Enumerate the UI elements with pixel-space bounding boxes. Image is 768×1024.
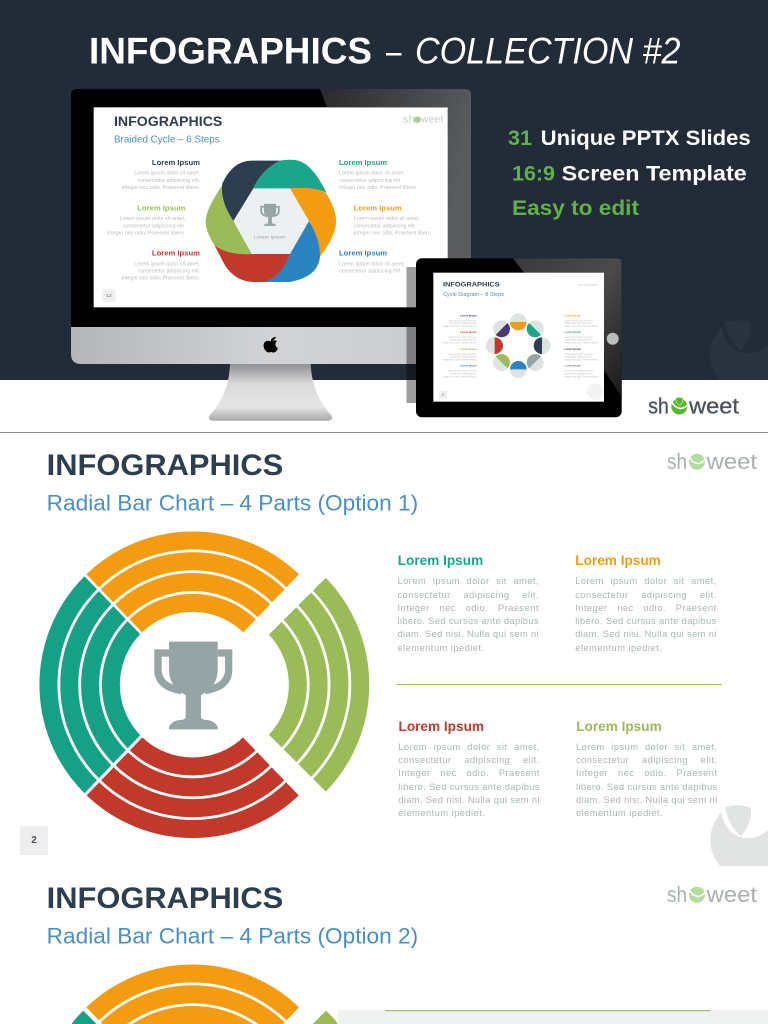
tablet screen slide: consectetur adipiscing elit. (449, 372, 477, 375)
monitor screen slide: consectetur adipiscing elit. (123, 223, 185, 229)
divider between header and slide (0, 432, 768, 433)
tablet home button (607, 333, 619, 345)
slide 1 heading (47, 449, 418, 516)
monitor screen slide: Lorem Ipsum (152, 158, 200, 167)
tablet screen slide: Integer nec odio. Praesent libero. (442, 325, 477, 328)
tablet screen slide: Lorem ipsum dolor sit amet, (448, 319, 477, 322)
text block: orange: Integer nec odio. Praesent (575, 603, 717, 613)
text block: green: libero. Sed cursus ante dapibus (576, 782, 718, 792)
monitor screen slide: Lorem Ipsum (152, 248, 200, 257)
feature list: Unique PPTX Slides (541, 127, 751, 150)
text block: teal: elementum ipediet. (398, 643, 485, 653)
red rings (86, 737, 299, 838)
text column divider (397, 684, 722, 685)
tablet screen slide: Integer nec odio. Praesent libero. (564, 375, 599, 378)
icon: small trophy (261, 204, 279, 226)
tablet screen slide: Lorem ipsum dolor sit amet, (564, 353, 593, 356)
tablet screen slide: Integer nec odio. Praesent libero. (564, 325, 599, 328)
icon: apple logo (264, 337, 278, 352)
monitor screen slide (94, 107, 448, 307)
tablet screen slide: Integer nec odio. Praesent libero. (564, 342, 599, 345)
monitor screen slide: consectetur adipiscing elit. (354, 223, 416, 229)
page number: 2 (31, 835, 37, 846)
header logo (648, 394, 739, 418)
text block: orange: elementum ipediet. (575, 643, 662, 653)
title (89, 30, 681, 72)
column headings: Lorem Ipsum (398, 552, 483, 568)
text block: orange: consectetur adipiscing elit. (575, 590, 717, 600)
monitor bezel (71, 89, 471, 327)
monitor screen slide: INFOGRAPHICS (114, 113, 222, 129)
slide 2 heading: INFOGRAPHICS (47, 882, 283, 915)
tablet screen slide: Lorem Ipsum (460, 330, 477, 334)
slide 2 gray panel (338, 1010, 768, 1024)
tablet screen slide: consectetur adipiscing elit. (449, 322, 477, 325)
icon: trophy (158, 642, 229, 729)
watermark logo (710, 805, 768, 866)
tablet screen slide: consectetur adipiscing elit. (449, 339, 477, 342)
monitor screen slide: Lorem ipsum dolor sit amet, (134, 261, 200, 267)
teal rings (39, 576, 140, 794)
slide 2 logo: sh (667, 882, 687, 907)
monitor screen slide: Lorem Ipsum (339, 248, 387, 257)
tablet screen slide: Integer nec odio. Praesent libero. (564, 359, 599, 362)
text block: teal: Lorem ipsum dolor sit amet, (398, 576, 539, 586)
orange rings (86, 532, 299, 632)
text block: red: consectetur adipiscing elit. (398, 755, 540, 765)
braided hexagon (206, 160, 336, 282)
column headings (398, 552, 662, 734)
monitor screen slide: Lorem Ipsum (354, 203, 402, 212)
text block: red: Lorem ipsum dolor sit amet, (398, 742, 540, 752)
tablet screen slide: 8 (442, 393, 444, 397)
monitor screen slide: Integer nec odio. Praesent libero. (121, 185, 200, 191)
orange bands (86, 964, 299, 1024)
text block: green: Integer nec odio. Praesent (576, 768, 718, 778)
text block: orange (575, 576, 717, 653)
slide 2 panel rule (385, 1010, 710, 1011)
tablet screen slide: Lorem ipsum dolor sit amet, (448, 353, 477, 356)
monitor screen slide: Lorem Ipsum (137, 203, 186, 212)
monitor screen slide: sh (402, 115, 415, 126)
monitor screen slide: Integer nec odio. Praesent libero. (354, 230, 432, 236)
monitor screen slide: Lorem ipsum dolor sit amet, (134, 171, 200, 177)
header logo: sh (648, 394, 669, 418)
monitor screen slide: Lorem Ipsum (339, 158, 387, 167)
slide 1 logo: weet (706, 449, 757, 474)
slide 2 heading: Radial Bar Chart – 4 Parts (Option 2) (47, 924, 418, 949)
slide 1 logo: sh (667, 449, 687, 474)
title: INFOGRAPHICS (89, 30, 372, 72)
header logo: weet (688, 394, 739, 418)
feature list: Easy to edit (512, 197, 639, 220)
tablet screen slide: Integer nec odio. Praesent libero. (442, 359, 477, 362)
tablet screen slide: Lorem ipsum dolor sit amet, (448, 370, 477, 373)
monitor screen slide: Integer nec odio. Praesent libero. (121, 276, 200, 282)
monitor chin (71, 327, 471, 364)
monitor (71, 89, 471, 421)
radial bar chart 2 (72, 964, 338, 1024)
text block: red: diam. Sed nisi. Nulla qui sem ni (398, 795, 540, 805)
tablet screen slide: consectetur adipiscing elit. (449, 356, 477, 359)
teal band tip (72, 1011, 96, 1024)
slide 2 logo: weet (706, 882, 757, 907)
slide 1 heading: INFOGRAPHICS (47, 449, 283, 482)
tablet screen slide: Lorem Ipsum (564, 347, 582, 351)
tablet screen slide: consectetur adipiscing elit. (564, 356, 592, 359)
tablet screen slide: consectetur adipiscing elit. (564, 339, 592, 342)
feature list (508, 127, 751, 220)
text block: green: Lorem ipsum dolor sit amet, (576, 742, 718, 752)
cycle diagram (486, 313, 551, 378)
tablet screen slide: Lorem Ipsum (460, 364, 477, 368)
tablet screen slide: Cycle Diagram – 8 Steps (443, 292, 504, 298)
green rings (269, 578, 370, 792)
text block: teal: Integer nec odio. Praesent (398, 603, 539, 613)
column headings: Lorem Ipsum (575, 552, 661, 568)
feature list: 31 (508, 127, 532, 150)
text block: teal: consectetur adipiscing elit. (398, 590, 539, 600)
tablet screen slide: Lorem Ipsum (564, 364, 582, 368)
tablet screen slide: Lorem ipsum dolor sit amet, (448, 336, 477, 339)
text block: teal: diam. Sed nisi. Nulla qui sem ni (398, 629, 539, 639)
tablet screen slide (433, 273, 604, 402)
text block: green: elementum ipediet. (576, 808, 663, 818)
tablet screen slide: Lorem ipsum dolor sit amet, (564, 336, 593, 339)
tablet screen slide: Lorem Ipsum (564, 313, 582, 317)
monitor screen slide: Lorem ipsum dolor sit amet, (339, 261, 405, 267)
monitor screen slide: Lorem ipsum dolor sit amet, (120, 216, 185, 222)
text block: teal (398, 576, 539, 653)
title: COLLECTION #2 (415, 30, 681, 72)
tablet shadow (406, 267, 416, 403)
tablet screen slide: consectetur adipiscing elit. (564, 322, 592, 325)
bezel gloss (320, 89, 471, 262)
dark header band (0, 0, 768, 380)
tablet screen slide: Lorem ipsum dolor sit amet, (564, 319, 593, 322)
text block: orange: Lorem ipsum dolor sit amet, (575, 576, 717, 586)
text block: orange: libero. Sed cursus ante dapibus (575, 616, 717, 626)
slide 2 heading (47, 882, 418, 949)
monitor screen slide: Lorem ipsum dolor sit amet, (339, 171, 405, 177)
monitor screen slide: consectetur adipiscing elit. (339, 269, 401, 275)
text block: green: consectetur adipiscing elit. (576, 755, 718, 765)
green band tip (313, 1011, 338, 1024)
text block: green (576, 742, 718, 818)
feature list: Screen Template (562, 163, 747, 186)
monitor stand (209, 364, 332, 421)
slide 1 logo (667, 449, 757, 474)
text block: teal: libero. Sed cursus ante dapibus (398, 616, 539, 626)
monitor screen slide: Braided Cycle – 6 Steps (114, 135, 220, 146)
header watermark logo (710, 320, 768, 380)
monitor screen slide: Integer nec odio. Praesent libero. (339, 185, 417, 191)
text block: green: diam. Sed nisi. Nulla qui sem ni (576, 795, 718, 805)
text block: orange: diam. Sed nisi. Nulla qui sem ni (575, 629, 717, 639)
page number (20, 826, 48, 855)
tablet screen slide: Integer nec odio. Praesent libero. (442, 375, 477, 378)
slide 1 heading: Radial Bar Chart – 4 Parts (Option 1) (47, 491, 418, 516)
text block: red: elementum ipediet. (398, 808, 485, 818)
tablet screen slide: Lorem ipsum dolor sit amet, (564, 370, 593, 373)
monitor screen slide: consectetur adipiscing elit. (137, 269, 200, 275)
text block: red: libero. Sed cursus ante dapibus (398, 782, 540, 792)
tablet screen slide: Integer nec odio. Praesent libero. (442, 342, 477, 345)
monitor screen slide: Integer nec odio. Praesent libero. (107, 230, 185, 236)
radial bar chart 1 (48, 540, 360, 829)
monitor screen slide: 12 (106, 293, 112, 298)
tablet screen slide: Lorem Ipsum (460, 313, 477, 317)
text block: red (398, 742, 540, 818)
tablet screen slide: showeet (578, 282, 599, 287)
column headings: Lorem Ipsum (576, 718, 662, 734)
tablet screen slide: INFOGRAPHICS (443, 282, 500, 289)
column headings: Lorem Ipsum (398, 718, 484, 734)
title: – (386, 30, 402, 72)
tablet screen slide: Lorem Ipsum (460, 347, 477, 351)
monitor screen slide: Lorem ipsum dolor sit amet, (354, 216, 419, 222)
tablet (416, 258, 622, 417)
monitor screen slide: consectetur adipiscing elit. (137, 178, 200, 184)
monitor screen slide: consectetur adipiscing elit. (339, 178, 401, 184)
slide 2 logo (667, 882, 757, 907)
feature list: 16:9 (512, 163, 555, 186)
braided hexagon: Lorem Ipsum (254, 235, 285, 240)
tablet screen slide: Lorem Ipsum (564, 330, 582, 334)
tablet gloss (513, 258, 622, 397)
monitor screen slide: weet (420, 115, 444, 126)
text block: red: Integer nec odio. Praesent (398, 768, 540, 778)
tablet screen slide: consectetur adipiscing elit. (564, 372, 592, 375)
